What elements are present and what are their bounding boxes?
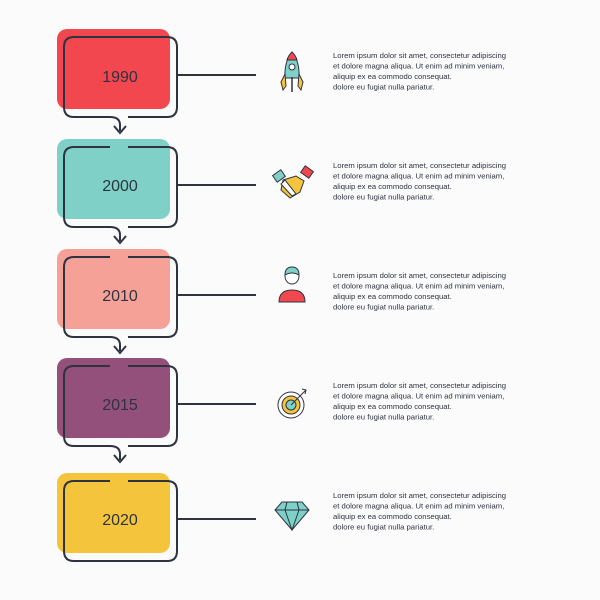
- icon: rocket: [281, 52, 303, 92]
- text blocks: et dolore magna aliqua. Ut enim ad minim veniam,: [333, 172, 504, 180]
- text blocks: Lorem ipsum dolor sit amet, consectetur adipiscing: [333, 51, 506, 60]
- text blocks: aliquip ex ea commodo consequat.: [333, 292, 452, 301]
- text blocks: et dolore magna aliqua. Ut enim ad minim veniam,: [333, 282, 504, 290]
- step 2010: 2010: [102, 288, 138, 305]
- step 2010: [57, 249, 256, 353]
- step 1990: 1990: [102, 69, 138, 86]
- text blocks: Lorem ipsum dolor sit amet, consectetur adipiscing: [333, 381, 506, 390]
- text blocks: dolore eu fugiat nulla pariatur.: [333, 192, 434, 202]
- text blocks: dolore eu fugiat nulla pariatur.: [333, 522, 434, 532]
- icon: diamond: [275, 502, 309, 530]
- step 2000: [57, 139, 256, 243]
- text blocks: aliquip ex ea commodo consequat.: [333, 72, 452, 81]
- step 1990: [57, 29, 256, 133]
- text blocks: et dolore magna aliqua. Ut enim ad minim veniam,: [333, 392, 504, 400]
- text blocks: et dolore magna aliqua. Ut enim ad minim veniam,: [333, 62, 504, 70]
- text blocks: Lorem ipsum dolor sit amet, consectetur adipiscing: [333, 161, 506, 170]
- step 2020: [57, 473, 256, 561]
- text blocks: Lorem ipsum dolor sit amet, consectetur adipiscing: [333, 271, 506, 280]
- text blocks: [333, 51, 506, 532]
- step 2000: 2000: [102, 178, 138, 195]
- text blocks: dolore eu fugiat nulla pariatur.: [333, 412, 434, 422]
- step 2020: 2020: [102, 512, 138, 529]
- icon: person: [279, 267, 305, 302]
- text blocks: dolore eu fugiat nulla pariatur.: [333, 302, 434, 312]
- text blocks: dolore eu fugiat nulla pariatur.: [333, 82, 434, 92]
- text blocks: et dolore magna aliqua. Ut enim ad minim veniam,: [333, 502, 504, 510]
- text blocks: aliquip ex ea commodo consequat.: [333, 182, 452, 191]
- step 2015: [57, 358, 256, 462]
- icon: target: [278, 389, 306, 418]
- step 2015: 2015: [102, 397, 138, 414]
- icon: handshake: [273, 166, 313, 198]
- text blocks: Lorem ipsum dolor sit amet, consectetur adipiscing: [333, 491, 506, 500]
- text blocks: aliquip ex ea commodo consequat.: [333, 512, 452, 521]
- text blocks: aliquip ex ea commodo consequat.: [333, 402, 452, 411]
